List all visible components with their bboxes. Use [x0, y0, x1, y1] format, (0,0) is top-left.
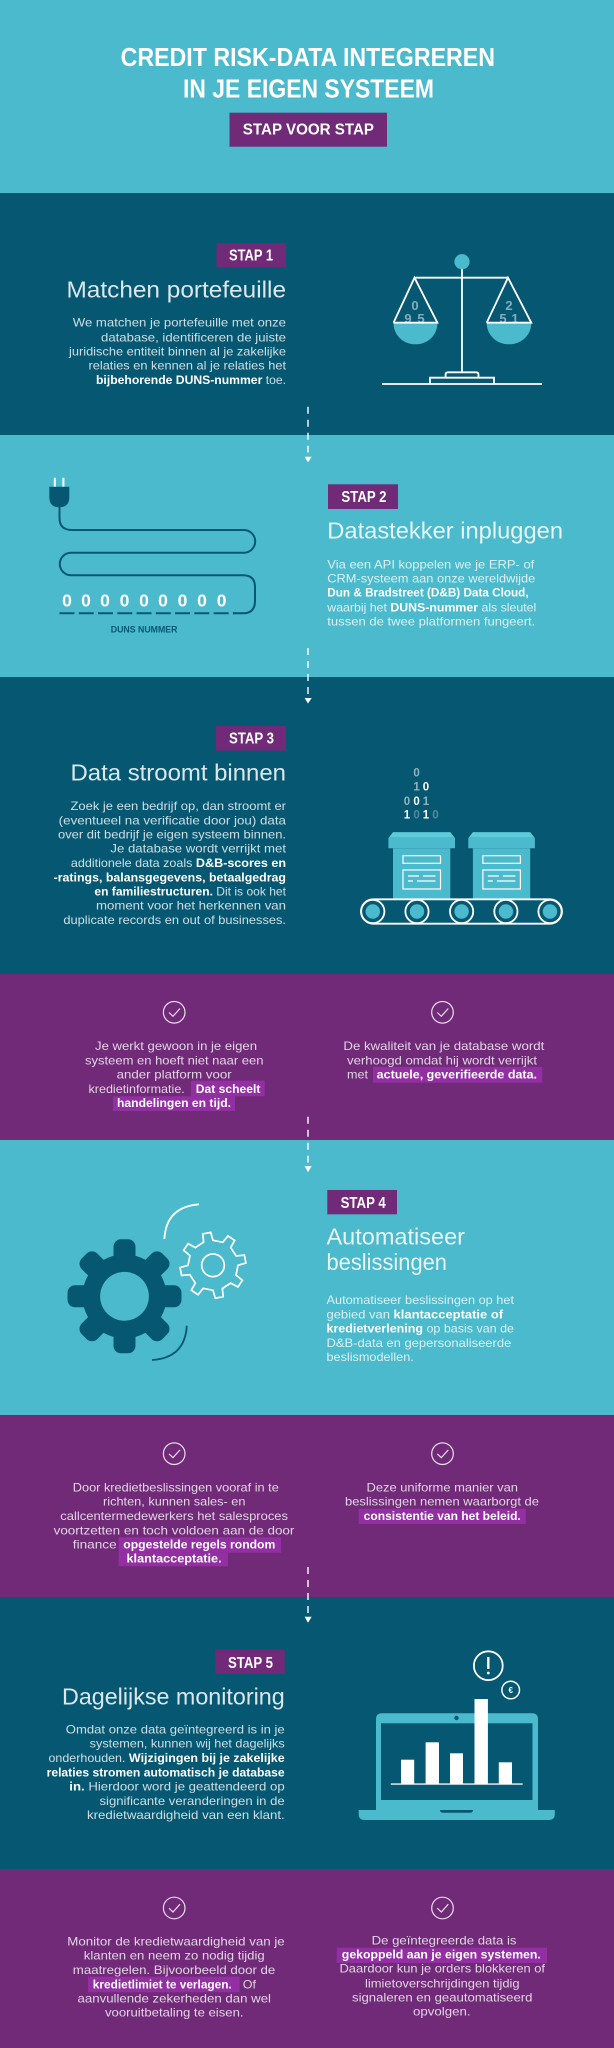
badge: stap 4	[327, 1190, 397, 1214]
text block: stap 1: juridische entiteit binnen al je zakelijke	[68, 344, 286, 358]
badge: stap 4: STAP 4	[341, 1195, 386, 1212]
icon: check left	[163, 1002, 185, 1023]
badge: stap 5: STAP 5	[228, 1655, 273, 1672]
text block: voordeel werkgemak: handelingen en tijd.	[117, 1096, 231, 1110]
text block: stap 3	[54, 799, 287, 927]
icon: scale: 2	[505, 298, 513, 313]
text block: stap 3: en familiestructuren. Dit is ook het	[94, 885, 287, 899]
icon: binary data	[404, 768, 439, 822]
icon: binary data: 1	[423, 796, 430, 808]
text block: voordeel kwaliteit: verhoogd omdat hij wordt verrijkt	[347, 1053, 538, 1067]
text block: voordeel monitoren: vooruitbetaling te eisen.	[105, 2006, 244, 2020]
text block: stap 3: Zoek je een bedrijf op, dan stroomt er	[70, 799, 286, 813]
title: CREDIT RISK-DATA INTEGREREN	[121, 42, 495, 72]
panel: stap 1	[0, 193, 614, 435]
text block: voordeel monitoren: Of	[243, 1977, 257, 1991]
text block: voordeel kwaliteit: De kwaliteit van je database wordt	[343, 1039, 545, 1053]
icon: binary data: 0	[413, 796, 420, 808]
text block: voordeel koppeling: Daardoor kun je orders blokkeren of	[340, 1962, 546, 1976]
icon: plug and cable: 0	[158, 591, 168, 611]
text block: stap 2: tussen de twee platformen fungeert.	[327, 615, 535, 629]
text block: voordeel monitoren: klanten en neem zo nodig tijdig	[84, 1949, 265, 1963]
text block: voordeel werkgemak: systeem en hoeft niet naar een	[85, 1053, 264, 1067]
text block: stap 1: relaties en kennen al je relaties het	[88, 358, 287, 372]
badge: stap 1: STAP 1	[229, 248, 273, 265]
icon: gears	[68, 1204, 251, 1360]
icon: laptop with bar chart: €	[508, 1686, 513, 1695]
text block: voordeel regels: richten, kunnen sales- en	[103, 1495, 246, 1509]
text block: voordeel regels: callcentermedewerkers het salesproces	[60, 1509, 288, 1523]
text block: stap 3: duplicate records en out of businesses.	[63, 913, 286, 927]
panel: voordelen stap 3	[0, 974, 614, 1140]
icon: scale	[382, 254, 542, 384]
text block: voordeel werkgemak: Je werkt gewoon in je eigen	[95, 1039, 257, 1053]
panel: stap 3	[0, 677, 614, 974]
icon: binary data: 1	[423, 810, 430, 822]
icon: plug and cable: 0	[139, 591, 149, 611]
icon: plug and cable: 0	[81, 591, 91, 611]
text block: voordeel kwaliteit: met	[347, 1068, 369, 1082]
subtitle badge	[230, 113, 387, 147]
icon: check left	[163, 1897, 185, 1919]
icon: plug and cable: 0	[120, 591, 130, 611]
heading: automatiseer beslissingen: beslissingen	[326, 1249, 447, 1275]
text block: stap 3: -ratings, balansgegevens, betaalgedrag	[54, 870, 286, 884]
text block: voordeel regels: finance	[73, 1538, 117, 1552]
text block: voordeel monitoren: maatregelen. Bijvoorbeeld door de	[73, 1963, 276, 1977]
icon: plug and cable	[49, 478, 255, 636]
panel: voordelen stap 5	[0, 1869, 614, 2048]
icon: binary data: 1	[404, 810, 411, 822]
text block: voordeel koppeling: signaleren en geautomatiseerd	[352, 1991, 532, 2005]
text block: voordeel monitoren	[67, 1934, 285, 2020]
text block: stap 4: beslismodellen.	[326, 1350, 414, 1364]
text block: stap 3: over dit bedrijf je eigen systeem binnen.	[58, 828, 286, 842]
icon: check right	[432, 1443, 453, 1464]
text block: stap 2: CRM-systeem aan onze wereldwijde	[327, 572, 536, 586]
text block: voordeel kwaliteit	[343, 1039, 545, 1083]
icon: scale: 9	[404, 311, 412, 326]
icon: scale: 5	[499, 311, 507, 326]
title	[121, 42, 495, 104]
text block: stap 5: in. Hierdoor word je geattendeerd op	[69, 1780, 285, 1794]
text block: stap 5: onderhouden. Wijzigingen bij je zakelijke	[48, 1751, 285, 1765]
text block: voordeel monitoren: aanvullende zekerheden dan wel	[78, 1992, 271, 2006]
text block: voordeel consistentie	[345, 1481, 539, 1524]
text block: stap 2: Dun & Bradstreet (D&B) Data Cloud,	[327, 586, 529, 600]
text block: voordeel werkgemak: Dat scheelt	[196, 1082, 260, 1096]
icon: laptop with bar chart	[359, 1651, 555, 1820]
icon: scale: 0	[411, 298, 419, 313]
text block: stap 4: kredietverlening op basis van de	[326, 1322, 514, 1336]
text block: stap 3: additionele data zoals D&B-scores en	[71, 856, 286, 870]
text block: voordeel koppeling: gekoppeld aan je eigen systemen.	[342, 1948, 541, 1962]
text block: stap 3: moment voor het herkennen van	[96, 899, 286, 913]
panel: stap 2	[0, 435, 614, 677]
icon: scale: 1	[511, 311, 519, 326]
heading: matchen portefeuille: Matchen portefeuille	[66, 277, 286, 303]
icon: plug and cable: 0	[178, 591, 188, 611]
arrow: voordelen naar stap 5	[305, 1567, 312, 1623]
icon: plug and cable: 0	[197, 591, 207, 611]
icon: scale: 5	[417, 311, 425, 326]
title: IN JE EIGEN SYSTEEM	[183, 74, 434, 104]
text block: stap 1: database, identificeren de juiste	[101, 330, 286, 344]
icon: check right	[432, 1897, 453, 1919]
badge: stap 5	[215, 1650, 285, 1674]
text block: voordeel koppeling: opvolgen.	[413, 2005, 471, 2019]
text block: voordeel regels	[54, 1481, 294, 1566]
icon: binary data: 0	[423, 782, 429, 794]
text block: stap 4: gebied van klantacceptatie of	[326, 1307, 504, 1321]
icon: check left	[163, 1443, 185, 1464]
icon: check right	[432, 1002, 453, 1023]
text block: voordeel werkgemak: kredietinformatie.	[88, 1082, 185, 1096]
icon: plug and cable: 0	[217, 591, 227, 611]
icon: binary data: 0	[432, 810, 439, 822]
icon: binary data: 0	[413, 810, 420, 822]
text block: stap 2: waarbij het DUNS-nummer als sleutel	[326, 601, 536, 615]
badge: stap 3	[216, 726, 286, 751]
icon: binary data: 0	[404, 796, 410, 808]
text block: voordeel consistentie: beslissingen nemen waarborgt de	[345, 1495, 539, 1509]
text block: voordeel koppeling: limietoverschrijdingen tijdig	[365, 1976, 520, 1990]
text block: stap 4	[326, 1293, 515, 1364]
text block: stap 3: Je database wordt verrijkt met	[110, 842, 287, 856]
text block: voordeel regels: opgestelde regels rondom	[123, 1538, 275, 1552]
text block: voordeel regels: klantacceptatie.	[126, 1552, 222, 1566]
text block: voordeel consistentie: Deze uniforme manier van	[366, 1481, 518, 1495]
text block: stap 5: systemen, kunnen wij het dagelijks	[90, 1737, 285, 1751]
icon: binary data: 1	[413, 782, 420, 794]
heading: datastekker inpluggen: Datastekker inpluggen	[327, 517, 563, 543]
text block: stap 4: D&B-data en gepersonaliseerde	[326, 1336, 512, 1350]
text block: stap 2: Via een API koppelen we je ERP- of	[327, 557, 535, 571]
arrow: stap 1 naar stap 2	[305, 407, 312, 462]
badge: stap 2: STAP 2	[341, 489, 387, 506]
text block: stap 5: kredietwaardigheid van een klant.	[87, 1808, 285, 1822]
text block: voordeel werkgemak: ander platform voor	[117, 1068, 232, 1082]
heading: data stroomt binnen: Data stroomt binnen	[70, 760, 286, 786]
text block: voordeel consistentie: consistentie van het beleid.	[364, 1509, 521, 1523]
text block: voordeel monitoren: kredietlimiet te verlagen.	[93, 1977, 232, 1991]
badge: stap 3: STAP 3	[229, 730, 274, 747]
heading: dagelijkse monitoring: Dagelijkse monitoring	[62, 1683, 285, 1709]
icon: binary data: 0	[413, 768, 420, 780]
icon: boxes on conveyor	[361, 832, 562, 924]
text block: voordeel koppeling: De geïntegreerde data is	[372, 1934, 516, 1948]
text block: stap 1: bijbehorende DUNS-nummer toe.	[96, 373, 286, 387]
text block: voordeel regels: Door kredietbeslissingen vooraf in te	[73, 1481, 279, 1495]
text block: stap 5: Omdat onze data geïntegreerd is in je	[66, 1722, 285, 1736]
text block: stap 5: relaties stromen automatisch je database	[47, 1765, 285, 1779]
text block: voordeel kwaliteit: actuele, geverifieerde data.	[377, 1068, 537, 1082]
text block: stap 3: (eventueel na verificatie door jou) data	[59, 813, 286, 827]
badge: stap 1	[216, 243, 286, 267]
panel: stap 4	[0, 1140, 614, 1415]
text block: stap 4: Automatiseer beslissingen op het	[326, 1293, 515, 1307]
text block: stap 1	[68, 316, 287, 387]
panel: stap 5	[0, 1597, 614, 1869]
panel: header	[0, 0, 614, 193]
arrow: voordelen naar stap 4	[305, 1117, 312, 1172]
icon: plug and cable: 0	[100, 591, 110, 611]
text block: voordeel koppeling	[337, 1934, 547, 2019]
panel: voordelen stap 4	[0, 1415, 614, 1597]
text block: stap 2	[326, 557, 536, 629]
text block: stap 5	[47, 1722, 285, 1822]
badge: stap 2	[328, 484, 398, 509]
text block: voordeel monitoren: Monitor de kredietwaardigheid van je	[67, 1934, 285, 1948]
heading: automatiseer beslissingen	[326, 1223, 465, 1275]
icon: plug and cable: DUNS NUMMER	[111, 625, 178, 636]
icon: plug and cable: 0	[62, 591, 72, 611]
text block: voordeel regels: voortzetten en toch voldoen aan de door	[54, 1523, 294, 1537]
text block: stap 5: significante veranderingen in de	[100, 1794, 285, 1808]
subtitle badge: STAP VOOR STAP	[243, 122, 374, 138]
arrow: stap 2 naar stap 3	[305, 648, 312, 704]
text block: stap 1: We matchen je portefeuille met onze	[73, 316, 286, 330]
heading: automatiseer beslissingen: Automatiseer	[326, 1223, 465, 1249]
text block: voordeel werkgemak	[85, 1039, 265, 1111]
